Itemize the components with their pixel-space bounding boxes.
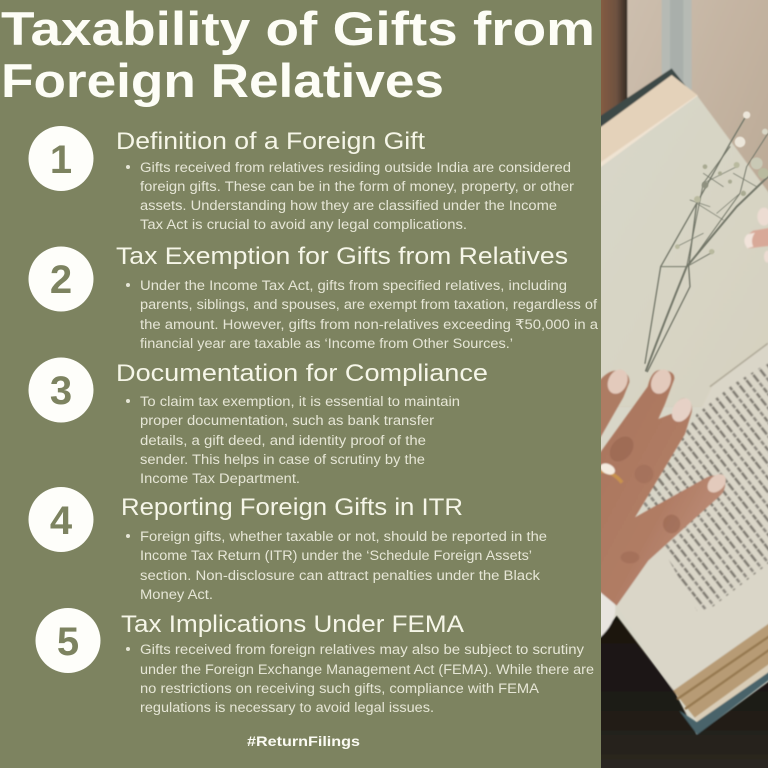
number badge 3: 3 bbox=[50, 369, 72, 413]
body text 5 bbox=[126, 642, 594, 715]
body text 1: Tax Act is crucial to avoid any legal complications. bbox=[140, 217, 467, 232]
sleeve bbox=[597, 589, 615, 641]
title: Taxability of Gifts from bbox=[1, 2, 595, 55]
body text 3: proper documentation, such as bank transfer bbox=[140, 413, 435, 428]
title: Foreign Relatives bbox=[1, 54, 444, 107]
body text 5: regulations is necessary to avoid legal issues. bbox=[140, 700, 434, 715]
number badge 4: 4 bbox=[50, 499, 73, 543]
body text 4: Money Act. bbox=[140, 587, 213, 602]
section 4: reporting in ITR bbox=[28, 487, 547, 602]
number badge 2 bbox=[28, 246, 94, 312]
heading 5: Tax Implications Under FEMA bbox=[121, 611, 464, 638]
heading 1: Definition of a Foreign Gift bbox=[116, 128, 425, 155]
section 3: documentation bbox=[28, 358, 488, 486]
body text 3: Income Tax Department. bbox=[140, 471, 300, 486]
body text 2: Under the Income Tax Act, gifts from specified relatives, including bbox=[140, 278, 567, 293]
body text 4: section. Non-disclosure can attract penalties under the Black bbox=[140, 568, 540, 583]
body text 3: details, a gift deed, and identity proof of the bbox=[140, 433, 426, 448]
body text 5: under the Foreign Exchange Management Act (FEMA). While there are bbox=[140, 662, 594, 677]
flower buds bbox=[675, 111, 768, 254]
section 1: definition of a foreign gift bbox=[28, 126, 575, 232]
number badge 1 bbox=[28, 126, 94, 191]
nails bbox=[604, 366, 631, 397]
number badge 3 bbox=[28, 358, 94, 422]
body text 1: foreign gifts. These can be in the form of money, property, or other bbox=[140, 179, 575, 194]
body text 1: Gifts received from relatives residing outside India are considered bbox=[140, 160, 571, 175]
number badge 5 bbox=[36, 608, 100, 673]
body text 2: the amount. However, gifts from non-relatives exceeding ₹50,000 in a bbox=[140, 317, 599, 332]
number badge 5: 5 bbox=[57, 620, 79, 664]
body text 2 bbox=[126, 278, 599, 351]
body text 2: parents, siblings, and spouses, are exempt from taxation, regardless of bbox=[140, 297, 597, 312]
dark table bbox=[597, 616, 768, 768]
right page with print bbox=[617, 337, 768, 691]
heading 3: Documentation for Compliance bbox=[116, 360, 488, 387]
photo: open book with hand and dried flowers bbox=[597, 0, 768, 768]
hashtag footer: #ReturnFilings bbox=[247, 733, 360, 749]
hand bbox=[597, 371, 629, 444]
number badge 1: 1 bbox=[50, 138, 72, 182]
panel: olive background bbox=[0, 0, 601, 768]
body text 3: sender. This helps in case of scrutiny by the bbox=[140, 452, 425, 467]
fingers at right edge bbox=[744, 208, 768, 263]
heading 2: Tax Exemption for Gifts from Relatives bbox=[116, 243, 568, 270]
number badge 2: 2 bbox=[50, 258, 72, 302]
body text 2: financial year are taxable as ‘Income from Other Sources.’ bbox=[140, 336, 513, 351]
body text 3: To claim tax exemption, it is essential to maintain bbox=[140, 394, 460, 409]
body text 4 bbox=[126, 529, 547, 602]
section 2: tax exemption bbox=[28, 243, 599, 351]
body text 1: assets. Understanding how they are classified under the Income bbox=[140, 198, 557, 213]
number badge 4 bbox=[28, 487, 94, 552]
title bbox=[1, 2, 595, 107]
body text 5: no restrictions on receiving such gifts, compliance with FEMA bbox=[140, 681, 539, 696]
body text 4: Income Tax Return (ITR) under the ‘Schedule Foreign Assets’ bbox=[140, 548, 532, 563]
dried flower stems bbox=[645, 115, 768, 372]
section 5: FEMA bbox=[36, 608, 594, 715]
heading 4: Reporting Foreign Gifts in ITR bbox=[121, 494, 463, 521]
knuckle shading bbox=[605, 432, 638, 466]
photo top: wall, book upper page and flowers bbox=[597, 0, 768, 407]
body text 4: Foreign gifts, whether taxable or not, should be reported in the bbox=[140, 529, 547, 544]
photo bottom: printed page, hand, ring, page edges bbox=[597, 337, 768, 768]
body text 1 bbox=[126, 160, 575, 232]
page edge wood bbox=[673, 618, 768, 718]
body text 3 bbox=[126, 394, 460, 486]
body text 5: Gifts received from foreign relatives may also be subject to scrutiny bbox=[140, 642, 584, 657]
